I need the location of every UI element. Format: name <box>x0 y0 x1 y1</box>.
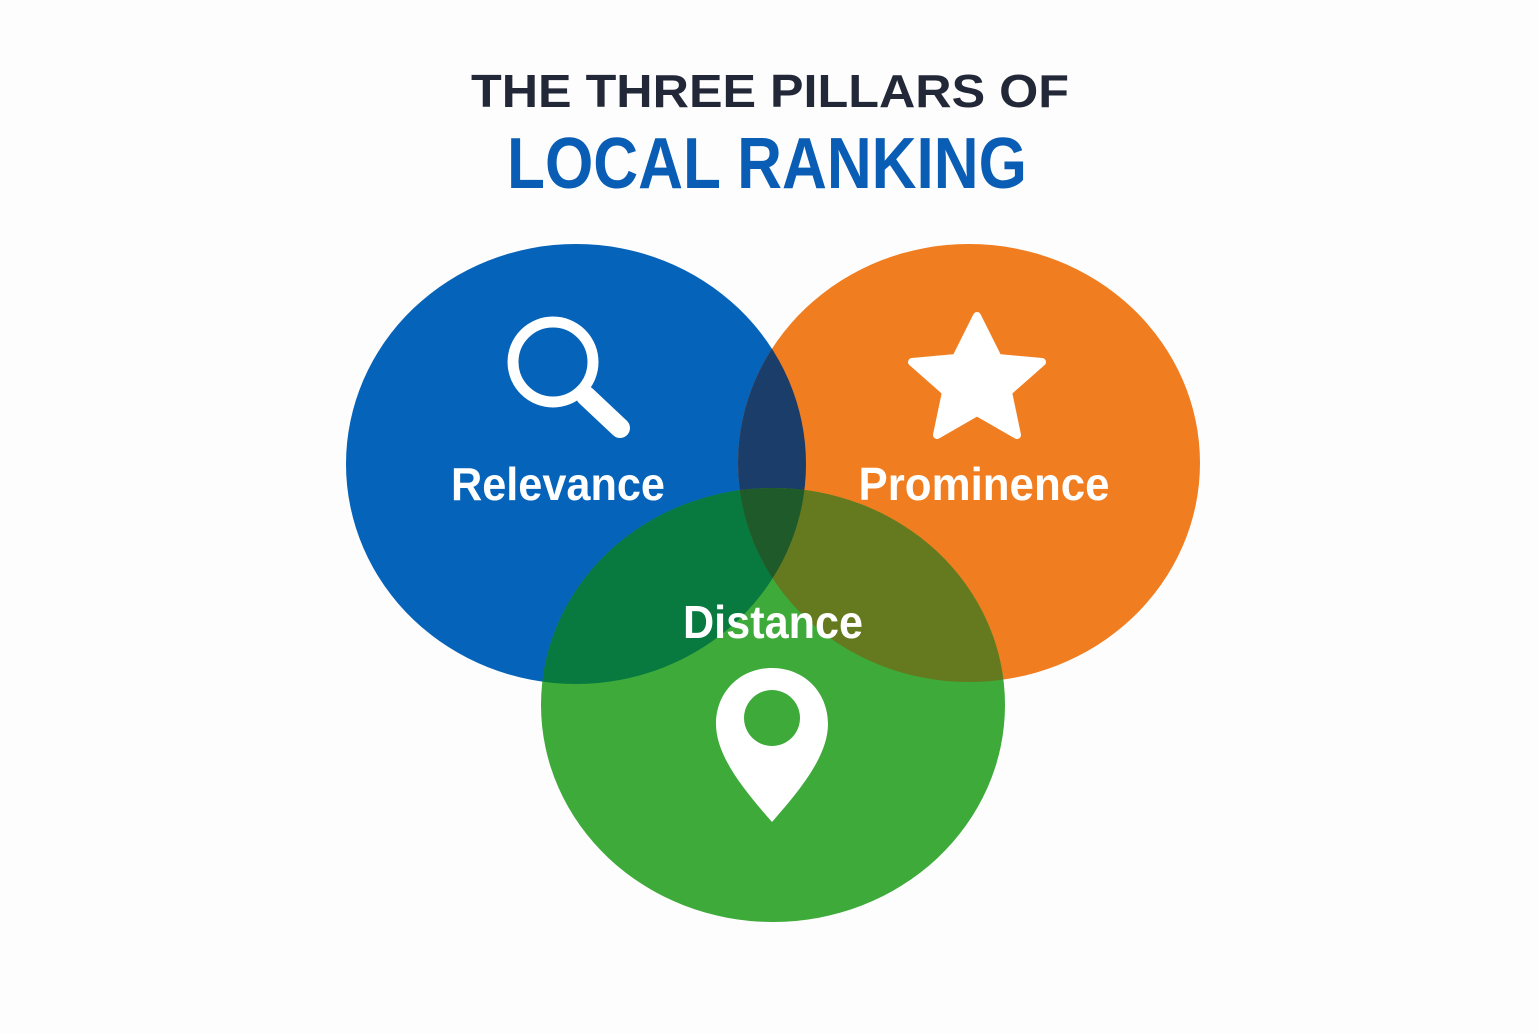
title <box>471 65 1069 204</box>
overlap: prominence-distance <box>740 488 1004 682</box>
icon: star <box>912 316 1042 435</box>
icon: magnifier <box>513 322 620 428</box>
circle: distance <box>541 488 1005 922</box>
overlap: relevance-distance <box>542 488 804 684</box>
venn diagram <box>346 244 1200 922</box>
overlap: relevance-prominence <box>738 349 806 490</box>
label: Prominence: Prominence <box>858 458 1110 510</box>
circle: relevance <box>346 244 806 684</box>
label: Distance: Distance <box>683 596 863 648</box>
label: Relevance: Relevance <box>451 458 665 510</box>
title: THE THREE PILLARS OF <box>471 65 1069 117</box>
circle: prominence <box>738 244 1200 682</box>
title: LOCAL RANKING <box>507 124 1027 204</box>
icon: location pin <box>716 668 828 822</box>
overlap: center <box>740 488 804 578</box>
